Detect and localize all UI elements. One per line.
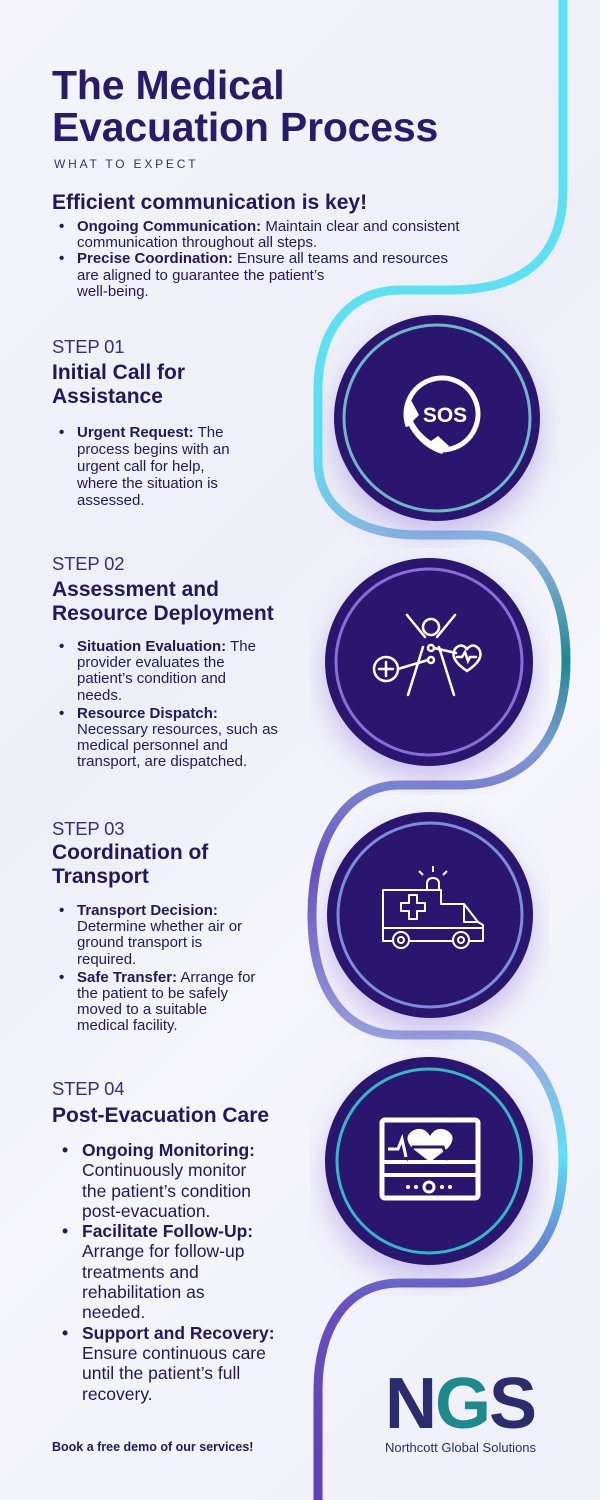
- step 01 text: assessed.: [77, 492, 145, 509]
- step 03 text: moved to a suitable: [77, 1001, 207, 1018]
- step 04 text: Ongoing Monitoring:: [82, 1140, 255, 1160]
- icon circle 3: ambulance: [316, 812, 545, 1044]
- step 04 text: rehabilitation as: [82, 1282, 205, 1302]
- title: The Medical: [52, 62, 284, 108]
- communication intro: are aligned to guarantee the patient’s: [77, 267, 324, 284]
- step 02 text: Assessment and: [52, 578, 219, 601]
- title: Evacuation Process: [52, 104, 438, 150]
- communication intro: Efficient communication is key!: [52, 191, 367, 214]
- step 04 text: Ensure continuous care: [82, 1343, 266, 1363]
- step 03 text: STEP 03: [52, 818, 124, 839]
- step 03 text: Transport Decision:: [77, 902, 218, 919]
- step 04 text: Arrange for follow-up: [82, 1241, 244, 1261]
- step 02 text: Situation Evaluation: The: [77, 638, 256, 655]
- step 02 text: needs.: [77, 687, 122, 704]
- call to action: Book a free demo of our services!: [52, 1440, 253, 1454]
- step 04 text: until the patient’s full: [82, 1363, 240, 1383]
- step 04 text: post-evacuation.: [82, 1201, 210, 1221]
- step 04 text: needed.: [82, 1302, 145, 1322]
- step 02 text: Resource Deployment: [52, 602, 274, 625]
- logo: NGS: NGS: [385, 1364, 535, 1444]
- step 02 text: Necessary resources, such as: [77, 721, 278, 738]
- step 01 text: urgent call for help,: [77, 458, 205, 475]
- step 01 text: Initial Call for: [52, 361, 185, 384]
- step 04 text: the patient’s condition: [82, 1181, 251, 1201]
- step 01 text: Assistance: [52, 385, 163, 408]
- step 04 text: Post-Evacuation Care: [52, 1104, 269, 1127]
- step 04 text: Continuously monitor: [82, 1160, 246, 1180]
- step 04 text: [52, 1078, 275, 1404]
- step 02 text: medical personnel and: [77, 737, 228, 754]
- subtitle: WHAT TO EXPECT: [54, 157, 198, 171]
- step 04 text: STEP 04: [52, 1078, 124, 1099]
- step 01 text: process begins with an: [77, 441, 230, 458]
- step 02 text: [52, 553, 278, 770]
- step 01 text: [52, 336, 230, 509]
- step 03 text: Safe Transfer: Arrange for: [77, 969, 255, 986]
- icon circle 1: SOS: SOS: [423, 404, 467, 427]
- icon circle 2: person with health symbols: [313, 558, 545, 792]
- step 04 text: Support and Recovery:: [82, 1323, 275, 1343]
- communication intro: communication throughout all steps.: [77, 234, 317, 251]
- communication intro: [52, 191, 460, 300]
- step 03 text: Transport: [52, 865, 149, 888]
- step 04 text: Facilitate Follow-Up:: [82, 1221, 253, 1241]
- step 02 text: patient’s condition and: [77, 670, 226, 687]
- step 02 text: transport, are dispatched.: [77, 753, 247, 770]
- step 03 text: medical facility.: [77, 1017, 178, 1034]
- step 02 text: provider evaluates the: [77, 654, 225, 671]
- step 04 text: recovery.: [82, 1384, 153, 1404]
- step 03 text: [52, 818, 256, 1034]
- step 03 text: required.: [77, 951, 136, 968]
- step 01 text: STEP 01: [52, 336, 124, 357]
- step 01 text: where the situation is: [77, 475, 218, 492]
- title: [52, 62, 438, 150]
- step 01 text: Urgent Request: The: [77, 424, 223, 441]
- step 04 text: treatments and: [82, 1262, 199, 1282]
- communication intro: well-being.: [77, 283, 149, 300]
- communication intro: Ongoing Communication: Maintain clear and consistent: [77, 218, 460, 235]
- logo: NGS: Northcott Global Solutions: [385, 1440, 536, 1455]
- icon circle 4: heart monitor: [313, 1057, 545, 1291]
- step 03 text: the patient to be safely: [77, 985, 228, 1002]
- communication intro: Precise Coordination: Ensure all teams and resources: [77, 250, 448, 267]
- step 03 text: Coordination of: [52, 841, 208, 864]
- step 03 text: ground transport is: [77, 934, 202, 951]
- step 03 text: Determine whether air or: [77, 918, 242, 935]
- icon circle 1: SOS: [322, 315, 552, 547]
- step 02 text: Resource Dispatch:: [77, 705, 218, 722]
- step 02 text: STEP 02: [52, 553, 124, 574]
